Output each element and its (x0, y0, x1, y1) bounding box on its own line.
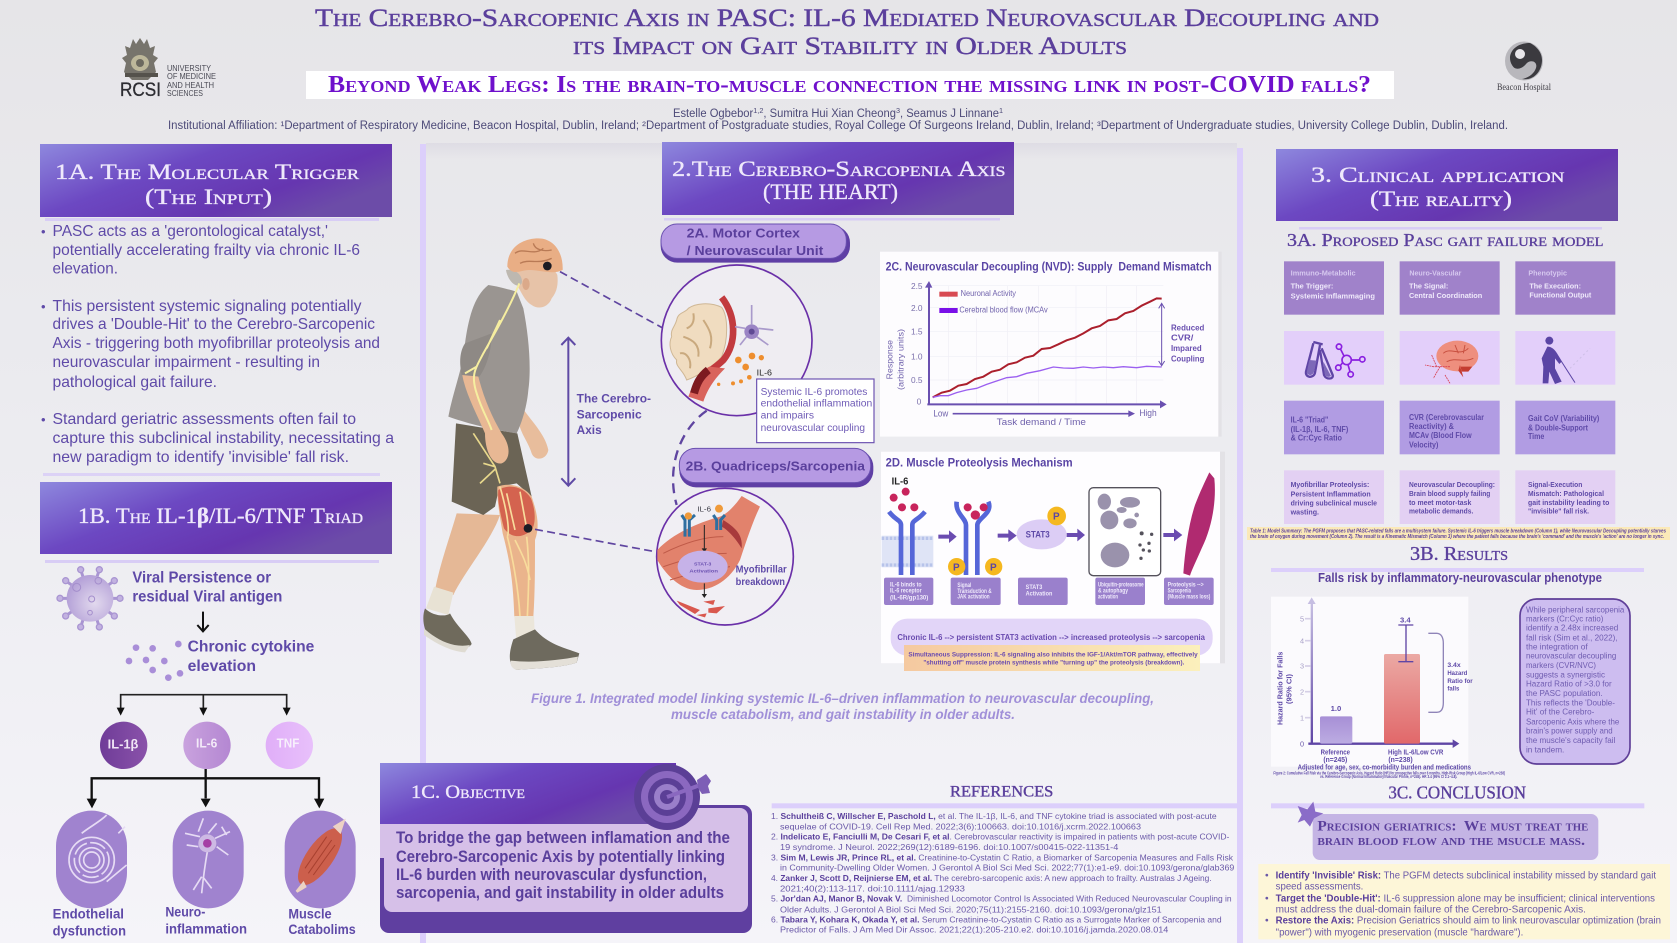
text: viral persistence (132, 570, 282, 606)
icon: target (634, 764, 711, 830)
heading 1B: 1B. The IL-1β/IL-6/TNF Triad (78, 503, 363, 528)
logo: Beacon Hospital: Beacon Hospital (1497, 82, 1551, 92)
note: simultaneous suppression: "shutting off" muscle protein synthesis while "turning up" the proteolysis (breakdown). (923, 661, 1185, 667)
arrows (938, 529, 1182, 543)
row: mechanisms: wasting. (1290, 507, 1319, 516)
reference list: 5. Jor'dan AJ, Manor B, Novak V. Diminished Locomotor Control Is Associated With Reduced Neurovascular Coupling in (771, 894, 1232, 904)
column divider left (420, 144, 426, 943)
title: The Cerebro-Sarcopenic Axis in PASC: IL-6 Mediated Neurovascular Decoupling and (315, 5, 1379, 32)
text block: 1A bullets: neurovascular impairment - resulting in (52, 354, 320, 371)
tick labels: 1.0 (911, 352, 923, 362)
label: axis: The Cerebro- (577, 392, 651, 406)
tick labels: 3 (1300, 662, 1304, 671)
logo: RCSI: UNIVERSITY (167, 64, 212, 73)
tick labels (1300, 614, 1304, 748)
row: biomarkers (1284, 401, 1615, 454)
bracket: hazard: Ratio for (1447, 678, 1473, 685)
row: trigger / signal / execution: Phenotypic (1528, 268, 1568, 277)
heading 1A: 1A. The Molecular Trigger (55, 159, 359, 184)
key points: speed assessments. (1276, 881, 1363, 892)
y-axis label: (95% CI) (1285, 674, 1294, 704)
row: biomarkers: & Cr:Cyc Ratio (1291, 433, 1342, 442)
bar: high IL-6 (1384, 615, 1420, 744)
banner: precision geriatrics: brain blood flow and the msucle mass. (1317, 833, 1585, 849)
y-axis label: (arbitrary units) (895, 329, 905, 390)
authors: 1 (999, 106, 1003, 115)
legend: Neuronal Activity (961, 289, 1016, 298)
panel: 2 heading: (THE HEART) (763, 179, 898, 204)
callout: systemic IL-6: neurovascular coupling (761, 423, 865, 434)
heading 3A: 3A. Proposed Pasc gait failure model (1287, 230, 1604, 250)
key points: Restore the Axis: Precision Geriatrics should aim to link neurovascular optimization (brain (1276, 916, 1661, 927)
row: biomarkers: CVR (Cerebrovascular (1409, 413, 1484, 422)
panel: 2 heading: 2.The Cerebro-Sarcopenia Axis (672, 156, 1006, 181)
reference list: in Community-Dwelling Older Women. J Gerontol A Biol Sci Med Sci. 2022;77(1):e1-e9. doi:10.1093/gerona/glab369 (780, 863, 1235, 873)
panel: 2D muscle proteolysis mechanism (881, 452, 1225, 671)
gap label (1171, 322, 1204, 363)
x-axis caption: Task demand / Time (997, 417, 1086, 427)
dashed connector: brain (560, 272, 663, 328)
tick labels: 0 (1300, 739, 1304, 748)
heading 3C: 3C. CONCLUSION (1388, 782, 1526, 802)
cytokine: TNF: TNF (277, 736, 300, 750)
line: cerebral blood flow (933, 366, 1162, 397)
authors: 1,2 (753, 106, 763, 115)
y-axis label: Hazard Ratio for Falls (1276, 652, 1285, 725)
inset: motor cortex (661, 265, 812, 416)
row: mechanisms: Persistent Inflammation (1291, 489, 1371, 498)
callout: systemic IL-6: and impairs (761, 411, 814, 422)
figure: walking man and insets (423, 224, 874, 670)
pill: 2A: / Neurovascular Unit (687, 243, 824, 258)
tick labels: 0 (917, 397, 922, 407)
bar: high IL-6: 3.4 (1400, 615, 1411, 624)
heading references: REFERENCES (950, 784, 1053, 801)
legend: Cerebral blood flow (MCAv (959, 306, 1048, 315)
y-axis label (885, 329, 905, 390)
callout: synergistic hazard: the PASC population. (1526, 688, 1603, 698)
heading 3B (1271, 543, 1644, 572)
icon: muscle capsule (285, 811, 356, 908)
step captions: Signal (957, 582, 972, 589)
step 1 receptor (882, 488, 933, 575)
labels: downstream effects: Neuro- (165, 904, 206, 920)
reference list: 1. Schultheiß C, Willscher E, Paschold L, et al. The IL-1β, IL-6, and TNF cytokine triad is associated with post-acute (771, 811, 1217, 821)
category labels: Reference (1321, 747, 1350, 756)
panel: 1B triad (40, 482, 392, 939)
tick labels: 2 (1300, 687, 1304, 696)
key points: must address the dual-domain failure of the Cerebro-Sarcopenic Axis. (1276, 905, 1586, 916)
step 3 STAT3 (1017, 507, 1067, 549)
tick labels: 2.0 (911, 303, 923, 313)
row: biomarkers: MCAv (Blood Flow (1409, 431, 1472, 440)
double arrow: axis (561, 338, 575, 486)
tick labels: 5 (1300, 614, 1304, 623)
row: mechanisms: Brain blood supply failing (1409, 489, 1491, 498)
inset: quadriceps: IL-6 (697, 507, 711, 514)
text: viral persistence: residual Viral antigen (132, 589, 282, 606)
callout: synergistic hazard: fall risk (Sim et al., 2022), (1526, 632, 1618, 642)
summary pill: Chronic IL-6 --> persistent STAT3 activation --> increased proteolysis --> sarcopenia (897, 633, 1206, 642)
callout: synergistic hazard: the muscle's capacity fail (1526, 735, 1615, 745)
panel: 1A molecular trigger (40, 144, 394, 476)
callout: synergistic hazard: Hit' of the Cerebro- (1526, 707, 1595, 717)
icon: star (1298, 802, 1323, 827)
tick labels: 1.5 (911, 327, 923, 337)
row: trigger / signal / execution: Systemic Inflammaging (1291, 291, 1375, 300)
panel: 3 heading (1276, 149, 1618, 230)
heading 3B: 3B. Results (1410, 543, 1508, 565)
reference list: 19 syndrome. J Neurol. 2022;269(12):6189-6196. doi:10.1007/s00415-022-11351-4 (780, 842, 1119, 852)
figure caption: Figure 1. Integrated model linking systemic IL-6–driven inflammation to neurovascular decoupling, (531, 690, 1154, 706)
row: trigger / signal / execution: The Trigger: (1291, 282, 1333, 291)
pill: 2B: 2B. Quadriceps/Sarcopenia (686, 459, 866, 474)
logo: RCSI: AND HEALTH (167, 81, 214, 90)
icon: virus (57, 567, 123, 630)
row: icons (1284, 331, 1615, 385)
text block: 1A bullets: drives a 'Double-Hit' to the Cerebro-Sarcopenic (52, 316, 375, 333)
callout: synergistic hazard: brain's power supply and (1526, 726, 1613, 736)
authors: Estelle Ogbebor (673, 108, 755, 120)
callout: synergistic hazard: neurovascular decoupling (1526, 651, 1617, 661)
row: mechanisms: Myofibrillar Proteolysis: (1291, 480, 1369, 489)
callout: synergistic hazard: This reflects the 'Double- (1526, 697, 1615, 707)
row: trigger / signal / execution: Functional Output (1529, 291, 1592, 300)
text block: 1A bullets (41, 223, 394, 466)
reference list: 6. Tabara Y, Kohara K, Okada Y, et al. Serum Creatinine-to-Cystatin C Ratio as a Surrogate Marker of Sarcopenia and (771, 914, 1222, 924)
bracket: hazard (1428, 633, 1473, 712)
callout: synergistic hazard: Sarcopenic Axis where the (1526, 716, 1620, 726)
text block: 1A bullets: new paradigm to identify 'invisible' fall risk. (52, 449, 349, 466)
title: its Impact on Gait Stability in Older Adults (573, 33, 1127, 60)
text: objective: To bridge the gap between inflamation and the (396, 829, 730, 847)
step captions: Ubiquitin-proteasome (1098, 582, 1144, 589)
category labels: Adjusted for age, sex, co-morbidity burden and medications (1298, 762, 1471, 771)
row: biomarkers: & Double-Support (1528, 423, 1588, 432)
cytokine: IL-6 (183, 722, 231, 769)
row: biomarkers: Gait CoV (Variability) (1528, 414, 1600, 423)
row: mechanisms: "invisible" fall risk. (1528, 506, 1589, 515)
step captions: IL-6 binds to (890, 582, 922, 589)
gap arrow (1159, 303, 1165, 366)
cytokine: TNF (266, 722, 313, 769)
row: mechanisms: driving subclinical muscle (1291, 498, 1377, 507)
panel: 1C objective (380, 763, 752, 933)
reference list: 4. Zanker J, Scott D, Reijnierse EM, et al. The cerebro-sarcopenic axis: A new approach to frailty. Australas J Ageing. (771, 873, 1212, 883)
labels: downstream effects: Catabolims (288, 921, 356, 937)
callout: synergistic hazard: While peripheral sarcopenia (1526, 604, 1625, 614)
callout: systemic IL-6: Systemic IL-6 promotes (761, 387, 867, 398)
row: trigger / signal / execution: Central Coordination (1409, 291, 1483, 300)
note: simultaneous suppression (904, 645, 1200, 671)
x-axis caption (933, 408, 1157, 427)
row: mechanisms: metabolic demands. (1409, 506, 1473, 515)
inset: quadriceps: STAT-3 (694, 561, 712, 567)
text block: 1A bullets: Standard geriatric assessments often fail to (52, 411, 356, 428)
callout: synergistic hazard: suggests a synergistic (1526, 669, 1605, 679)
illustration: older man walking (423, 238, 579, 670)
text block: 1A bullets: capture this subclinical instability, necessitating a (52, 430, 394, 447)
logo: RCSI: RCSI (120, 80, 161, 101)
callout: synergistic hazard: markers (CVR/NVC) (1526, 660, 1596, 670)
authors: 3 (896, 106, 900, 115)
cytokine: IL-6: IL-6 (196, 736, 217, 750)
bracket: hazard: falls (1447, 686, 1460, 693)
labels: downstream effects (53, 904, 356, 939)
pill: 2A (661, 224, 850, 263)
banner: precision geriatrics: Precision geriatrics: We must treat the (1317, 819, 1589, 835)
column divider right (1237, 148, 1243, 943)
bracket: hazard: 3.4x (1447, 662, 1461, 669)
gap label: Coupling (1171, 353, 1204, 363)
step 2 JAK: P (990, 562, 997, 573)
category labels: (n=238) (1388, 755, 1413, 764)
axes (1305, 597, 1459, 748)
gap label: Impared (1171, 343, 1202, 353)
text block: 1A bullets: Axis - triggering both myofibrillar proteolysis and (52, 335, 380, 352)
dashed connector: arc (673, 411, 707, 505)
bracket: hazard: Hazard (1447, 670, 1467, 677)
text block: 1A bullets: elevation. (52, 260, 118, 278)
key points: • (1265, 870, 1269, 881)
text: objective: sarcopenia, and gait instability in older adults (396, 884, 724, 902)
tick labels: 2.5 (911, 281, 923, 291)
heading 2C: 2C. Neurovascular Decoupling (NVD): Supply Demand Mismatch (886, 260, 1212, 274)
logo: RCSI: SCIENCES (167, 89, 203, 98)
subtitle banner: Beyond Weak Legs: Is the brain-to-muscle connection the missing link in post-COVID falls? (328, 72, 1371, 98)
authors: , Sumitra Hui Xian Cheong (763, 108, 896, 120)
figure caption: muscle catabolism, and gait instability in older adults. (671, 706, 1015, 722)
note: table 1 summary (1247, 527, 1670, 540)
panel: 2C neurovascular decoupling chart (880, 252, 1222, 437)
labels: downstream effects: inflammation (165, 920, 247, 936)
step captions: (IL-6R/gp130) (890, 594, 928, 601)
text block: 1A bullets: pathological gait failure. (52, 374, 217, 391)
heading 1C: 1C. Objective (411, 782, 525, 803)
icon: person with cane (1542, 337, 1590, 384)
figure 2 note: Figure 2: Cumulative Fall Risk via the Cerebro-Sarcopenic Axis. Hazard Ratio (HR) for prospective falls over 6 months. High-Risk Group (High IL-6/Low CVR, n=238) (1273, 770, 1505, 775)
gap label: Reduced (1171, 322, 1204, 332)
panel: references (771, 784, 1240, 934)
text: chronic cytokine: Chronic cytokine (188, 638, 314, 655)
callout: synergistic hazard: markers (Cr:Cyc ratio) (1526, 614, 1604, 624)
tick labels (911, 281, 923, 407)
cytokine: IL-1β (100, 722, 147, 769)
callout: synergistic hazard: the integration of (1526, 641, 1588, 651)
panel: 3 heading: (The reality) (1370, 186, 1512, 211)
arrow: to cytokine (197, 612, 209, 631)
label: axis (577, 392, 651, 437)
callout: systemic IL-6: endothelial inflammation (761, 399, 872, 410)
text block: 1A bullets: • (41, 224, 46, 239)
step 5 muscle (1183, 472, 1215, 576)
figure 2 note (1273, 770, 1505, 779)
inset: quadriceps: Activation (689, 569, 718, 575)
panel: 2 heading (662, 142, 1014, 220)
text: objective: Cerebro-Sarcopenic Axis by potentially linking (396, 848, 725, 866)
row: trigger / signal / execution: Immuno-Metabolic (1291, 268, 1356, 277)
banner: precision geriatrics (1313, 814, 1598, 860)
row: trigger / signal / execution: The Signal: (1409, 282, 1448, 291)
axes (925, 281, 1167, 408)
callout: synergistic hazard: in tandem. (1526, 744, 1564, 754)
reference list: Older Adults. J Gerontol A Biol Sci Med Sci. 2020;75(11):2155-2160. doi:10.1093/gerona/glz151 (780, 904, 1162, 914)
text: objective: IL-6 burden with neurovascular dysfunction, (396, 866, 707, 884)
reference list: 2. Indelicato E, Fanciulli M, De Cesari F, et al. Cerebrovascular reactivity is impaired in patients with post-acute COVID- (771, 832, 1229, 842)
step 3 STAT3: P (1053, 512, 1060, 523)
row: mechanisms: gait instability leading to (1528, 498, 1610, 507)
triad flow diagram (53, 567, 356, 939)
row: biomarkers: IL-6 "Triad" (1291, 415, 1329, 424)
step captions: (Muscle mass loss) (1168, 594, 1210, 601)
callout: synergistic hazard (1520, 599, 1630, 764)
reference list: 2021;40(2):113-117. doi:10.1111/ajag.12933 (780, 883, 965, 893)
icon: endothelial capsule (56, 811, 127, 908)
row: biomarkers: (IL-1β, IL-6, TNF) (1291, 425, 1349, 434)
pill: 2A: 2A. Motor Cortex (687, 225, 801, 240)
title (315, 5, 1379, 60)
key points: Target the 'Double-Hit': IL-6 suppression alone may be insufficient; clinical interventions (1276, 893, 1655, 904)
reference list: sequelae of COVID-19. Cell Rep Med. 2022;3(6):100663. doi:10.1016/j.xcrm.2022.100663 (780, 821, 1141, 831)
arrows: three-way branch (117, 695, 291, 716)
logo: RCSI: OF MEDICINE (167, 72, 216, 81)
step captions: Transduction & (957, 588, 992, 595)
heading 2D: 2D. Muscle Proteolysis Mechanism (886, 456, 1073, 470)
labels: downstream effects: Endothelial (53, 905, 124, 921)
step captions: Sarcopenia (1168, 588, 1191, 595)
figure caption (531, 690, 1154, 722)
step captions (884, 578, 1214, 605)
callout: systemic IL-6 (757, 379, 874, 443)
callout: synergistic hazard: Hazard Ratio of >3.0 for (1526, 679, 1612, 689)
y-axis label: Response (885, 340, 895, 379)
key points (1258, 864, 1670, 939)
labels: downstream effects: dysfunction (53, 923, 126, 939)
row: biomarkers: Velocity) (1409, 440, 1439, 449)
inset: quadriceps: breakdown (736, 577, 785, 588)
row: trigger / signal / execution: Neuro-Vascular (1409, 268, 1461, 277)
labels: downstream effects: Muscle (288, 905, 332, 921)
step captions: Activation (1026, 591, 1052, 598)
label: axis: Sarcopenic (577, 407, 642, 421)
text block: 1A bullets: This persistent systemic signaling potentially (52, 298, 362, 315)
reference list (771, 811, 1235, 934)
step 2 JAK: P (953, 562, 960, 573)
reference list: 3. Sim M, Lewis JR, Prince RL, et al. Creatinine-to-Cystatin C Ratio, a Biomarker of Sarcopenia Measures and Falls Risk (771, 852, 1234, 862)
icon: neuron capsule (173, 811, 244, 908)
row: mechanisms: Mismatch: Pathological (1528, 489, 1604, 498)
legend (939, 289, 1048, 315)
line: neuronal activity (933, 298, 1162, 397)
heading 1A (40, 144, 392, 221)
affiliations: Institutional Affiliation: ¹Department of Respiratory Medicine, Beacon Hospital, Dublin, Ireland; ²Department of Postgraduate studies, Royal College Of Surgeons Ireland, Dublin, Ireland; ³Department of Undergraduate studies, University College Dublin, Dublin, Ireland. (168, 120, 1508, 132)
icon: test tubes and molecule (1306, 342, 1365, 379)
inset: quadriceps: Myofibrillar (736, 565, 787, 576)
key points: • (1265, 893, 1269, 904)
bar: reference (1320, 704, 1352, 744)
step captions: & autophagy (1098, 588, 1128, 595)
tick labels: 0.5 (911, 375, 923, 385)
text: chronic cytokine: elevation (188, 658, 256, 675)
step 2 JAK (948, 502, 1002, 575)
label: axis: Axis (577, 423, 602, 437)
step 3 STAT3: STAT3 (1026, 529, 1050, 539)
logo: Beacon Hospital (1497, 42, 1551, 92)
authors: , Seamus J Linnane (900, 108, 999, 120)
category labels: (n=245) (1323, 755, 1348, 764)
panel: 3B hazard ratio chart (1271, 597, 1630, 779)
chart title 3B: Falls risk by inflammatory-neurovascular phenotype (1318, 571, 1602, 585)
icon: cytokine dots (126, 641, 183, 681)
x-axis caption: Low (933, 409, 949, 419)
callout: synergistic hazard: identify a 2.48x increased (1526, 623, 1619, 633)
row: trigger / signal / execution: The Execution: (1529, 282, 1581, 291)
row: mechanisms (1284, 470, 1615, 524)
step captions: IL-6 receptor (890, 588, 922, 595)
text: chronic cytokine (188, 638, 314, 675)
row: biomarkers: Time (1528, 432, 1545, 441)
text block: 1A bullets: PASC acts as a 'gerontological catalyst,' (52, 223, 328, 240)
reference list: Predictor of Falls. J Am Med Dir Assoc. 2021;22(1):205-210.e2. doi:10.1016/j.jamda.2020.08.014 (780, 924, 1169, 934)
step captions: JAK activation (957, 594, 990, 601)
key points: "power") with myogenic preservation (muscle "hardware"). (1276, 928, 1523, 939)
tick labels: 4 (1300, 636, 1304, 645)
step captions: activation (1098, 594, 1118, 601)
panel: 3 heading: 3. Clinical application (1311, 162, 1565, 187)
arrows: downstream branch (87, 769, 324, 808)
text: objective (396, 829, 730, 902)
inset: quadriceps (657, 488, 793, 625)
dashed connector: knee (535, 529, 655, 552)
cytokine: IL-1β: IL-1β (108, 738, 139, 752)
icon: brain (1425, 341, 1478, 383)
label IL-6: IL-6 (892, 476, 909, 487)
step captions: Proteolysis --> (1168, 582, 1204, 589)
text block: 1A bullets: • (41, 412, 46, 427)
tick labels: 1 (1300, 713, 1304, 722)
x-axis caption: High (1139, 408, 1157, 418)
gap label: CVR/ (1171, 333, 1194, 343)
text: viral persistence: Viral Persistence or (132, 570, 271, 587)
heading 1A: (The Input) (145, 184, 272, 209)
y-axis label (1276, 652, 1294, 725)
summary pill (891, 619, 1213, 656)
row: trigger / signal / execution (1284, 261, 1615, 315)
figure 2 note: vs. Reference Group (Normal Inflammatory/Vascular Profile, n=245). HR 3.4 (95% CI 2.1–4.8). (1320, 774, 1457, 779)
category labels (1298, 747, 1471, 771)
row: mechanisms: Neurovascular Decoupling: (1409, 480, 1495, 489)
panel: 3A table (1284, 261, 1615, 524)
inset: motor cortex: IL-6 (757, 368, 773, 377)
row: mechanisms: to meet motor-task (1409, 498, 1472, 507)
bar: reference: 1.0 (1331, 704, 1341, 713)
category labels: High IL-6/Low CVR (1388, 747, 1444, 756)
text block: 1A bullets: • (41, 299, 46, 314)
logo: RCSI (120, 38, 216, 101)
key points: • (1265, 916, 1269, 927)
text block: 1A bullets: potentially accelerating frailty via chronic IL-6 (52, 242, 360, 259)
pill: 2B (679, 448, 873, 487)
row: biomarkers: Reactivity) & (1409, 422, 1454, 431)
step 4 proteasome box (1089, 488, 1161, 576)
key points: Identify 'Invisible' Risk: The PGFM detects subclinical instability missed by standard gait (1276, 870, 1656, 881)
note: simultaneous suppression: Simultaneous Suppression: IL-6 signaling also inhibits the IGF-1/Akt/mTOR pathway, effectively (908, 652, 1198, 658)
step captions: STAT3 (1026, 584, 1043, 591)
panel: 3C conclusion (1258, 782, 1670, 939)
heading 1B (40, 482, 392, 563)
row: mechanisms: Signal-Execution (1528, 480, 1583, 489)
